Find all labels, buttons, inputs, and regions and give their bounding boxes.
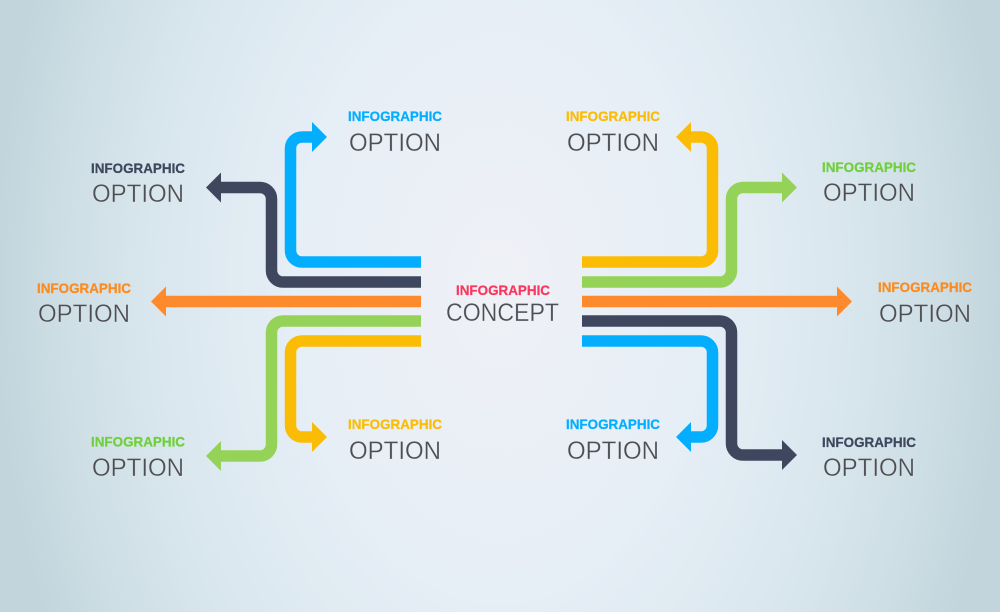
arrow: left yellow (290, 341, 421, 452)
label: green option left: OPTION (92, 454, 184, 482)
label: orange option left (37, 280, 131, 328)
label: orange option left: INFOGRAPHIC (37, 280, 131, 296)
arrow: left navy (206, 172, 421, 282)
arrow: left blue (290, 122, 421, 262)
center label: infographic concept (446, 282, 559, 327)
arrow: right green (582, 172, 797, 282)
label: green option left: INFOGRAPHIC (91, 434, 185, 450)
label: top-left blue option: OPTION (349, 129, 441, 157)
label: green option right: INFOGRAPHIC (822, 159, 916, 175)
label: orange option right (878, 279, 972, 328)
center label: infographic concept: CONCEPT (446, 299, 559, 327)
label: green option right: OPTION (823, 179, 915, 207)
label: yellow option left: INFOGRAPHIC (348, 416, 442, 432)
arrow: right navy (582, 321, 797, 470)
label: navy option left: INFOGRAPHIC (91, 160, 185, 176)
label: yellow option right: INFOGRAPHIC (566, 108, 660, 124)
label: yellow option right (566, 108, 660, 157)
label: yellow option right: OPTION (567, 129, 659, 157)
label: yellow option left: OPTION (349, 437, 441, 465)
label: orange option right: INFOGRAPHIC (878, 279, 972, 295)
label: blue option right: INFOGRAPHIC (566, 416, 660, 432)
label: top-left blue option (348, 108, 442, 157)
label: green option right (822, 159, 916, 207)
label: top-left blue option: INFOGRAPHIC (348, 108, 442, 124)
center label: infographic concept: INFOGRAPHIC (456, 282, 550, 298)
arrow: left green (206, 321, 421, 471)
label: navy option right: INFOGRAPHIC (822, 434, 916, 450)
label: navy option right: OPTION (823, 454, 915, 482)
label: navy option left (91, 160, 185, 208)
arrow: left orange (151, 286, 421, 316)
label: green option left (91, 434, 185, 482)
label: orange option right: OPTION (879, 300, 971, 328)
arrow: right orange (582, 286, 852, 316)
arrow: right yellow (582, 122, 712, 262)
label: orange option left: OPTION (38, 300, 130, 328)
label: yellow option left (348, 416, 442, 465)
label: blue option right (566, 416, 660, 465)
label: navy option right (822, 434, 916, 482)
label: navy option left: OPTION (92, 180, 184, 208)
label: blue option right: OPTION (567, 437, 659, 465)
arrow: right blue (582, 341, 712, 452)
